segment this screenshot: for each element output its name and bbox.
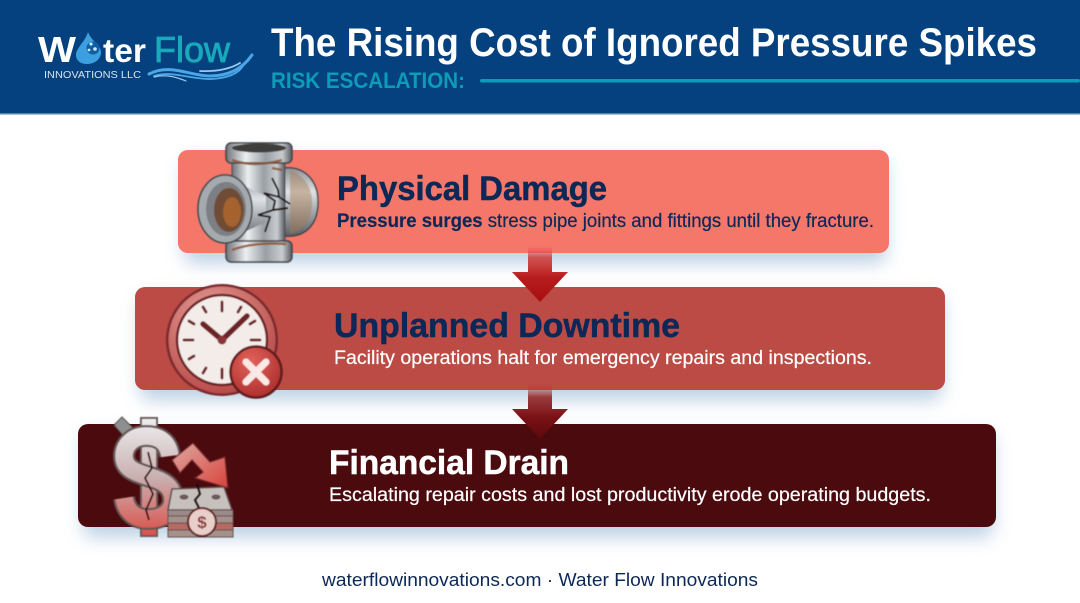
text: unplanned downtime description: Facility operations halt for emergency repairs and inspections. bbox=[334, 348, 872, 369]
footer: waterflowinnovations.com · Water Flow Innovations bbox=[321, 570, 758, 590]
subtitle rule bbox=[480, 79, 1080, 82]
icon: water drop bbox=[76, 32, 101, 64]
text: physical damage description: Pressure surges stress pipe joints and fittings until they fracture. bbox=[337, 211, 874, 232]
text: financial drain description: Escalating repair costs and lost productivity erode operating budgets. bbox=[329, 485, 931, 506]
icon: cracked pipe fitting bbox=[198, 143, 318, 262]
logo: Water Flow Innovations LLC: ter bbox=[103, 32, 146, 69]
icon: broken dollar with falling arrow and cash bbox=[114, 417, 233, 537]
subtitle: risk escalation: RISK ESCALATION: bbox=[271, 68, 465, 93]
panel: unplanned downtime bbox=[135, 284, 945, 400]
icon: clock with x badge bbox=[166, 284, 282, 398]
logo: Water Flow Innovations LLC: Flow bbox=[154, 29, 231, 70]
heading: physical damage: Physical Damage bbox=[337, 170, 607, 208]
heading: financial drain: Financial Drain bbox=[329, 444, 569, 482]
header band bbox=[0, 0, 1080, 114]
arrow: downtime to financial drain bbox=[512, 383, 568, 439]
icon: broken dollar with falling arrow and cash: $ bbox=[197, 513, 207, 532]
heading: unplanned downtime: Unplanned Downtime bbox=[334, 307, 680, 345]
title: The Rising Cost of Ignored Pressure Spikes bbox=[271, 21, 1037, 65]
logo: Water Flow Innovations LLC bbox=[38, 29, 252, 81]
logo: Water Flow Innovations LLC: W bbox=[38, 29, 76, 70]
logo: Water Flow Innovations LLC: INNOVATIONS LLC bbox=[44, 69, 141, 81]
panel: financial drain bbox=[78, 417, 996, 537]
panel: physical damage bbox=[178, 143, 889, 263]
icon: logo waves bbox=[149, 55, 252, 81]
arrow: damage to downtime bbox=[512, 246, 568, 302]
